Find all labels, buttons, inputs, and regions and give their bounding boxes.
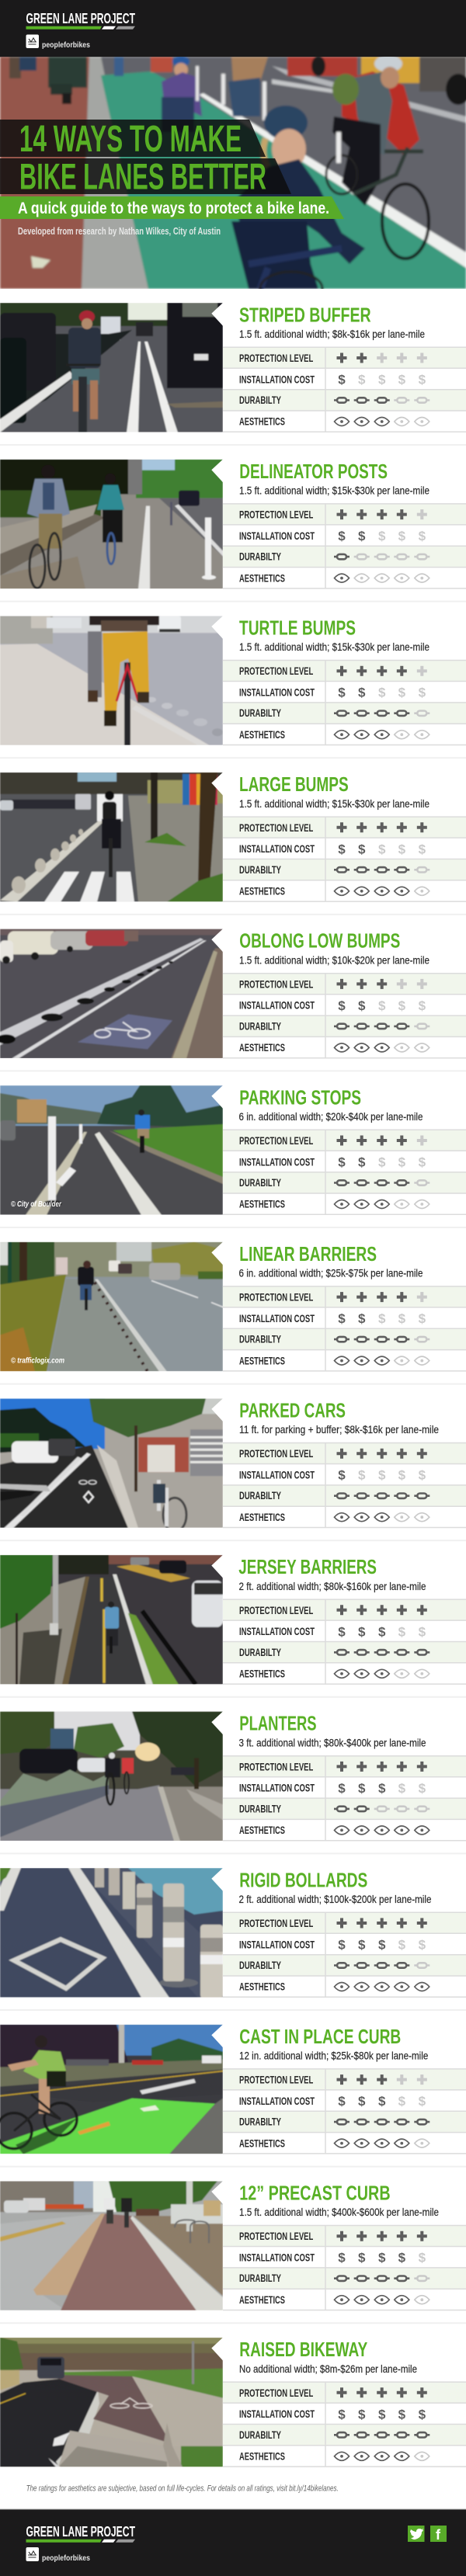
title: linear barriers: LINEAR BARRIERS	[239, 1242, 377, 1265]
ratings table: jersey barriers: $	[398, 1624, 406, 1639]
ratings table: oblong low bumps: $	[398, 998, 406, 1013]
ratings table: cast in place curb: AESTHETICS	[239, 2137, 285, 2149]
ratings table: striped buffer: DURABILTY	[239, 394, 281, 406]
ratings table: cast in place curb: DURABILTY	[239, 2116, 281, 2128]
ratings table: raised bikeway: DURABILTY	[239, 2428, 281, 2441]
ratings table: planters: INSTALLATION COST	[239, 1782, 315, 1794]
spec: large bumps: 1.5 ft. additional width; $15k-$30k per lane-mile	[239, 797, 429, 810]
section: jersey barriers	[0, 1555, 466, 1698]
ratings table: 12 inch precast curb: $	[358, 2251, 366, 2265]
ratings table: rigid bollards	[239, 1917, 429, 1993]
ratings table: 12 inch precast curb	[239, 2230, 429, 2306]
ratings table: rigid bollards: $	[338, 1938, 346, 1952]
ratings table: planters: $	[358, 1781, 366, 1796]
ratings table: jersey barriers	[239, 1604, 429, 1680]
ratings table: parking stops: PROTECTION LEVEL	[239, 1134, 314, 1147]
ratings table: parked cars: $	[358, 1468, 366, 1483]
ratings table: rigid bollards: $	[358, 1938, 366, 1952]
title: turtle bumps: TURTLE BUMPS	[239, 616, 356, 640]
ratings table: parked cars: PROTECTION LEVEL	[239, 1447, 314, 1460]
ratings table: oblong low bumps: $	[358, 998, 366, 1013]
ratings table: cast in place curb: INSTALLATION COST	[239, 2095, 315, 2107]
ratings table: raised bikeway: $	[419, 2407, 426, 2422]
ratings table: cast in place curb: $	[358, 2094, 366, 2109]
spec: raised bikeway: No additional width; $8m-$26m per lane-mile	[239, 2362, 417, 2375]
spec: linear barriers: 6 in. additional width; $25k-$75k per lane-mile	[239, 1267, 423, 1279]
ratings table: raised bikeway: $	[378, 2407, 386, 2422]
section: planters	[0, 1711, 466, 1854]
section: parked cars	[0, 1398, 466, 1541]
ratings table: parking stops: $	[338, 1155, 346, 1169]
spec: delineator posts: 1.5 ft. additional width; $15k-$30k per lane-mile	[239, 484, 429, 497]
ratings table: delineator posts: $	[378, 529, 386, 543]
ratings table: parking stops: $	[419, 1155, 426, 1169]
section: raised bikeway	[0, 2338, 466, 2470]
ratings table: oblong low bumps: DURABILTY	[239, 1019, 281, 1032]
ratings table: jersey barriers: $	[378, 1624, 386, 1639]
footer logo: people for bikes: peopleforbikes	[42, 2553, 90, 2563]
ratings table: 12 inch precast curb: $	[378, 2251, 386, 2265]
ratings table: delineator posts: PROTECTION LEVEL	[239, 509, 314, 521]
ratings table: striped buffer: PROTECTION LEVEL	[239, 352, 314, 364]
ratings table: delineator posts: $	[358, 529, 366, 543]
photo: parking stops: © City of Boulder	[11, 1200, 62, 1209]
spec: parking stops: 6 in. additional width; $20k-$40k per lane-mile	[239, 1110, 423, 1123]
ratings table: large bumps: INSTALLATION COST	[239, 842, 315, 855]
ratings table: parking stops: $	[398, 1155, 406, 1169]
ratings table: linear barriers: $	[358, 1311, 366, 1326]
title band: Bike Lanes Better	[0, 155, 291, 197]
ratings table: turtle bumps: $	[338, 686, 346, 700]
ratings table: parking stops: $	[358, 1155, 366, 1169]
ratings table: striped buffer	[239, 352, 429, 428]
ratings table: cast in place curb: $	[398, 2094, 406, 2109]
ratings table: linear barriers: PROTECTION LEVEL	[239, 1291, 314, 1304]
ratings table: jersey barriers: INSTALLATION COST	[239, 1625, 315, 1637]
ratings table: turtle bumps: $	[378, 686, 386, 700]
ratings table: rigid bollards: AESTHETICS	[239, 1981, 285, 1993]
ratings table: large bumps: AESTHETICS	[239, 884, 285, 897]
ratings table: parked cars: $	[338, 1468, 346, 1483]
section: delineator posts	[0, 460, 466, 602]
ratings table: turtle bumps: AESTHETICS	[239, 728, 285, 741]
logo: Green Lane Project	[26, 11, 135, 30]
ratings table: linear barriers: $	[378, 1311, 386, 1326]
ratings table: planters: DURABILTY	[239, 1802, 281, 1814]
ratings table: cast in place curb: PROTECTION LEVEL	[239, 2074, 314, 2086]
title: delineator posts: DELINEATOR POSTS	[239, 460, 388, 483]
ratings table: parked cars: AESTHETICS	[239, 1511, 285, 1523]
ratings table: large bumps	[239, 821, 429, 897]
photo: linear barriers	[0, 1242, 223, 1372]
ratings table: parked cars	[239, 1447, 429, 1523]
photo: jersey barriers	[0, 1555, 223, 1685]
photo: striped buffer	[0, 303, 223, 432]
ratings table: oblong low bumps	[239, 977, 429, 1054]
title band: 14 Ways to Make: 14 WAYS TO MAKE	[19, 119, 242, 160]
ratings table: delineator posts: $	[398, 529, 406, 543]
ratings table: parked cars: $	[378, 1468, 386, 1483]
footer logo: people for bikes	[26, 2547, 90, 2563]
hero photo: riders on a green bike lane	[0, 55, 466, 306]
ratings table: cast in place curb: $	[378, 2094, 386, 2109]
section: linear barriers	[0, 1242, 466, 1385]
ratings table: oblong low bumps: $	[378, 998, 386, 1013]
ratings table: oblong low bumps: INSTALLATION COST	[239, 999, 315, 1012]
ratings table: raised bikeway: $	[358, 2407, 366, 2422]
photo: large bumps	[0, 772, 223, 902]
ratings table: jersey barriers: DURABILTY	[239, 1646, 281, 1658]
footer bar	[0, 2509, 466, 2576]
spec: planters: 3 ft. additional width; $80k-$400k per lane-mile	[239, 1736, 426, 1748]
section: rigid bollards	[0, 1868, 466, 2011]
ratings table: linear barriers: $	[419, 1311, 426, 1326]
ratings table: turtle bumps: $	[419, 686, 426, 700]
ratings table: 12 inch precast curb: $	[338, 2251, 346, 2265]
ratings table: linear barriers: DURABILTY	[239, 1333, 281, 1345]
ratings table: large bumps: $	[419, 842, 426, 856]
title: raised bikeway: RAISED BIKEWAY	[239, 2338, 367, 2361]
ratings table: delineator posts: INSTALLATION COST	[239, 529, 315, 542]
ratings table: oblong low bumps: AESTHETICS	[239, 1041, 285, 1054]
ratings table: rigid bollards: $	[378, 1938, 386, 1952]
ratings table: turtle bumps: DURABILTY	[239, 706, 281, 719]
ratings table: parked cars: INSTALLATION COST	[239, 1468, 315, 1481]
ratings table: delineator posts: $	[338, 529, 346, 543]
header bar	[0, 0, 466, 57]
ratings table: planters: $	[398, 1781, 406, 1796]
section: turtle bumps	[0, 616, 466, 759]
photo: oblong low bumps	[0, 929, 223, 1058]
ratings table: raised bikeway: $	[398, 2407, 406, 2422]
photo: cast in place curb	[0, 2025, 223, 2154]
ratings table: large bumps: $	[358, 842, 366, 856]
ratings table: large bumps: $	[338, 842, 346, 856]
logo: Green Lane Project: GREEN LANE PROJECT	[26, 11, 135, 26]
ratings table: large bumps: PROTECTION LEVEL	[239, 821, 314, 834]
ratings table: cast in place curb: $	[338, 2094, 346, 2109]
ratings table: delineator posts: $	[419, 529, 426, 543]
ratings table: raised bikeway	[239, 2387, 429, 2463]
ratings table: striped buffer: $	[419, 373, 426, 387]
ratings table: raised bikeway: PROTECTION LEVEL	[239, 2387, 314, 2399]
ratings table: striped buffer: $	[338, 373, 346, 387]
spec: jersey barriers: 2 ft. additional width; $80k-$160k per lane-mile	[239, 1580, 426, 1592]
spec: cast in place curb: 12 in. additional width; $25k-$80k per lane-mile	[239, 2050, 428, 2062]
ratings table: 12 inch precast curb: INSTALLATION COST	[239, 2251, 315, 2263]
photo: turtle bumps	[0, 616, 223, 745]
ratings table: cast in place curb: $	[419, 2094, 426, 2109]
photo: parked cars	[0, 1398, 223, 1532]
ratings table: rigid bollards: INSTALLATION COST	[239, 1938, 315, 1950]
ratings table: parking stops: $	[378, 1155, 386, 1169]
icon: facebook	[430, 2526, 447, 2543]
subtitle band	[0, 196, 344, 219]
ratings table: jersey barriers: $	[419, 1624, 426, 1639]
icon: twitter	[408, 2526, 424, 2542]
ratings table: linear barriers: INSTALLATION COST	[239, 1312, 315, 1324]
ratings table: linear barriers: AESTHETICS	[239, 1354, 285, 1366]
ratings table: striped buffer: INSTALLATION COST	[239, 373, 315, 385]
title: large bumps: LARGE BUMPS	[239, 772, 349, 796]
ratings table: turtle bumps: INSTALLATION COST	[239, 686, 315, 699]
ratings table: raised bikeway: AESTHETICS	[239, 2450, 285, 2463]
photo: planters	[0, 1711, 223, 1841]
ratings table: planters: $	[338, 1781, 346, 1796]
logo: people for bikes	[26, 34, 90, 50]
footer logo: Green Lane Project: GREEN LANE PROJECT	[26, 2524, 135, 2540]
ratings table: turtle bumps: PROTECTION LEVEL	[239, 665, 314, 677]
photo: parking stops	[0, 1085, 223, 1215]
title: oblong low bumps: OBLONG LOW BUMPS	[239, 929, 400, 953]
section: 12 inch precast curb	[0, 2181, 466, 2324]
spec: turtle bumps: 1.5 ft. additional width; $15k-$30k per lane-mile	[239, 641, 429, 653]
ratings table: parking stops: INSTALLATION COST	[239, 1155, 315, 1168]
ratings table: parked cars: DURABILTY	[239, 1489, 281, 1502]
title: planters: PLANTERS	[239, 1712, 317, 1735]
ratings table: jersey barriers: AESTHETICS	[239, 1668, 285, 1680]
title band: 14 Ways to Make	[0, 119, 266, 160]
title: parking stops: PARKING STOPS	[239, 1085, 361, 1109]
ratings table: delineator posts: AESTHETICS	[239, 571, 285, 584]
spec: rigid bollards: 2 ft. additional width; $100k-$200k per lane-mile	[239, 1893, 432, 1905]
ratings table: rigid bollards: $	[398, 1938, 406, 1952]
ratings table: turtle bumps: $	[358, 686, 366, 700]
ratings table: 12 inch precast curb: PROTECTION LEVEL	[239, 2230, 314, 2242]
ratings table: rigid bollards: PROTECTION LEVEL	[239, 1917, 314, 1929]
ratings table: large bumps: $	[398, 842, 406, 856]
spec: striped buffer: 1.5 ft. additional width; $8k-$16k per lane-mile	[239, 328, 425, 340]
ratings table: 12 inch precast curb: AESTHETICS	[239, 2293, 285, 2306]
ratings table: delineator posts: DURABILTY	[239, 550, 281, 563]
section: striped buffer	[0, 303, 466, 446]
ratings table: linear barriers: $	[338, 1311, 346, 1326]
ratings table: oblong low bumps: $	[338, 998, 346, 1013]
section: large bumps	[0, 772, 466, 915]
title: jersey barriers: JERSEY BARRIERS	[238, 1555, 377, 1578]
photo: raised bikeway	[0, 2338, 223, 2470]
ratings table: turtle bumps	[239, 665, 429, 741]
title: cast in place curb: CAST IN PLACE CURB	[239, 2025, 401, 2048]
ratings table: oblong low bumps: $	[419, 998, 426, 1013]
ratings table: striped buffer: $	[398, 373, 406, 387]
ratings table: parked cars: $	[398, 1468, 406, 1483]
title: striped buffer: STRIPED BUFFER	[239, 303, 371, 326]
section: parking stops	[0, 1085, 466, 1228]
ratings table: planters: $	[419, 1781, 426, 1796]
ratings table: turtle bumps: $	[398, 686, 406, 700]
ratings table: large bumps: DURABILTY	[239, 863, 281, 876]
ratings table: delineator posts	[239, 509, 429, 584]
ratings table: parking stops: AESTHETICS	[239, 1198, 285, 1210]
icon: facebook: f	[436, 2527, 441, 2543]
ratings table: jersey barriers: $	[358, 1624, 366, 1639]
ratings table: 12 inch precast curb: DURABILTY	[239, 2272, 281, 2284]
ratings table: parking stops	[239, 1134, 429, 1210]
ratings table: linear barriers	[239, 1291, 429, 1366]
ratings table: jersey barriers: PROTECTION LEVEL	[239, 1604, 314, 1616]
ratings table: striped buffer: $	[358, 373, 366, 387]
footnote: The ratings for aesthetics are subjective, based on full life-cycles. For details on all ratings, visit bit.ly/14bikelanes.	[26, 2484, 339, 2494]
subtitle band: A quick guide to the ways to protect a bike lane.	[18, 200, 329, 217]
photo: linear barriers: © trafficlogix.com	[11, 1357, 64, 1366]
ratings table: 12 inch precast curb: $	[419, 2251, 426, 2265]
ratings table: parking stops: DURABILTY	[239, 1176, 281, 1189]
ratings table: planters: AESTHETICS	[239, 1824, 285, 1836]
ratings table: planters: PROTECTION LEVEL	[239, 1760, 314, 1772]
research credit: Developed from research by Nathan Wilkes, City of Austin	[18, 226, 221, 237]
ratings table: striped buffer: $	[378, 373, 386, 387]
ratings table: parked cars: $	[419, 1468, 426, 1483]
ratings table: jersey barriers: $	[338, 1624, 346, 1639]
ratings table: raised bikeway: $	[338, 2407, 346, 2422]
title: 12 inch precast curb: 12” PRECAST CURB	[239, 2181, 391, 2204]
photo: rigid bollards	[0, 1868, 223, 1998]
title: parked cars: PARKED CARS	[239, 1398, 346, 1422]
logo: people for bikes: peopleforbikes	[42, 40, 90, 50]
section: oblong low bumps	[0, 929, 466, 1071]
ratings table: 12 inch precast curb: $	[398, 2251, 406, 2265]
ratings table: planters: $	[378, 1781, 386, 1796]
title band: Bike Lanes Better: BIKE LANES BETTER	[19, 155, 266, 197]
ratings table: oblong low bumps: PROTECTION LEVEL	[239, 977, 314, 990]
ratings table: rigid bollards: DURABILTY	[239, 1959, 281, 1971]
footer logo: Green Lane Project	[26, 2524, 135, 2543]
ratings table: rigid bollards: $	[419, 1938, 426, 1952]
section: cast in place curb	[0, 2025, 466, 2168]
title: rigid bollards: RIGID BOLLARDS	[239, 1868, 367, 1891]
photo: delineator posts	[0, 460, 223, 589]
ratings table: cast in place curb	[239, 2074, 429, 2149]
ratings table: striped buffer: AESTHETICS	[239, 415, 285, 428]
ratings table: planters	[239, 1760, 429, 1836]
ratings table: linear barriers: $	[398, 1311, 406, 1326]
spec: oblong low bumps: 1.5 ft. additional width; $10k-$20k per lane-mile	[239, 953, 429, 966]
ratings table: raised bikeway: INSTALLATION COST	[239, 2408, 315, 2420]
photo: precast curb	[0, 2181, 223, 2310]
ratings table: large bumps: $	[378, 842, 386, 856]
